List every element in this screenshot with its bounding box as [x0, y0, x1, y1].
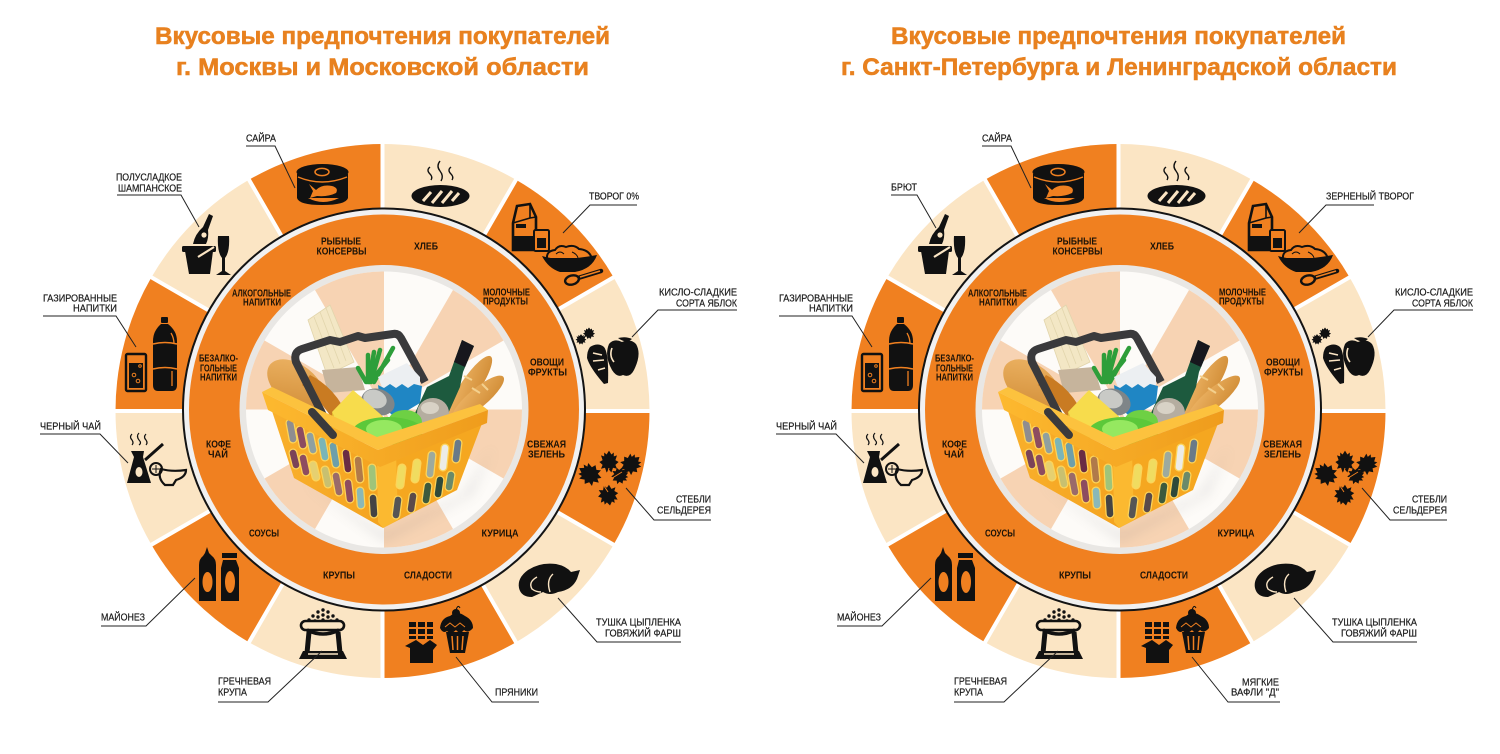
- title: Saint Petersburg: Вкусовые предпочтения покупателей: [891, 23, 1346, 50]
- callout: полусладкое шампанское: [116, 172, 199, 227]
- inner category labels: ЧАЙ: [208, 448, 228, 460]
- icon: chicken: [519, 564, 580, 597]
- icon: vegetables and fruit: [1312, 328, 1375, 384]
- callout: зерненый творог: [1299, 190, 1415, 233]
- callout: майонез: МАЙОНЕЗ: [837, 610, 881, 624]
- callout: черный чай: ЧЕРНЫЙ ЧАЙ: [776, 420, 837, 432]
- callout: кисло-сладкие сорта яблок: КИСЛО-СЛАДКИЕ: [659, 288, 737, 298]
- icon: greens: [574, 449, 646, 507]
- inner category labels: КОФЕ: [206, 440, 231, 450]
- inner category labels: ГОЛЬНЫЕ: [200, 364, 237, 374]
- callout: тушка цыпленка, говяжий фарш: ТУШКА ЦЫПЛЕНКА: [1332, 618, 1417, 628]
- inner category labels: ОВОЩИ: [1266, 358, 1300, 368]
- inner category labels: КУРИЦА: [482, 528, 518, 540]
- icon: soft drinks: [862, 317, 913, 391]
- inner category labels: ЗЕЛЕНЬ: [528, 450, 565, 460]
- callout: стебли сельдерея: [1362, 488, 1447, 520]
- inner category labels: [935, 236, 1303, 582]
- basket illustration: [258, 305, 509, 540]
- callout: кисло-сладкие сорта яблок: КИСЛО-СЛАДКИЕ: [1395, 288, 1473, 298]
- icon: canned fish: [1032, 164, 1084, 205]
- callout: брют: БРЮТ: [891, 182, 917, 194]
- title: Moscow: г. Москвы и Московской области: [176, 54, 589, 81]
- icon: soft drinks: [126, 317, 177, 391]
- icon: bread: [1148, 161, 1206, 207]
- callout: черный чай: [40, 420, 128, 463]
- inner category labels: ОВОЩИ: [530, 358, 564, 368]
- inner category labels: ПРОДУКТЫ: [1219, 296, 1264, 308]
- callout: стебли сельдерея: СЕЛЬДЕРЕЯ: [1393, 506, 1447, 516]
- inner category labels: АЛКОГОЛЬНЫЕ: [968, 288, 1027, 300]
- inner category labels: ПРОДУКТЫ: [483, 296, 528, 308]
- inner category labels: ФРУКТЫ: [1264, 368, 1303, 378]
- icon: chicken: [1255, 564, 1316, 597]
- callout: стебли сельдерея: СЕЛЬДЕРЕЯ: [657, 506, 711, 516]
- inner category labels: ФРУКТЫ: [528, 368, 567, 378]
- inner category labels: СЛАДОСТИ: [1140, 570, 1188, 582]
- panel: Moscow wheel: [40, 132, 737, 702]
- callout: мягкие вафли Д: МЯГКИЕ: [1242, 678, 1279, 688]
- callout: кисло-сладкие сорта яблок: [1368, 288, 1473, 337]
- callout: тушка цыпленка, говяжий фарш: ГОВЯЖИЙ ФАРШ: [1341, 626, 1417, 640]
- inner category labels: МОЛОЧНЫЕ: [483, 288, 530, 298]
- callout: гречневая крупа: КРУПА: [218, 688, 247, 698]
- callout: пряники: ПРЯНИКИ: [495, 688, 538, 698]
- inner category labels: НАПИТКИ: [936, 372, 973, 384]
- callout: зерненый творог: ЗЕРНЕНЫЙ ТВОРОГ: [1326, 190, 1415, 202]
- callout: майонез: МАЙОНЕЗ: [101, 610, 145, 624]
- callout: сайра: САЙРА: [246, 132, 276, 144]
- inner category labels: ХЛЕБ: [414, 242, 438, 252]
- icon: greens: [1310, 449, 1382, 507]
- wheel rings and sectors: [850, 142, 1388, 680]
- icon: cereals: [1035, 608, 1083, 659]
- callout: кисло-сладкие сорта яблок: СОРТА ЯБЛОК: [676, 298, 737, 310]
- inner category labels: СВЕЖАЯ: [1263, 440, 1302, 450]
- wheel rings and sectors: [114, 142, 652, 680]
- callout: газированные напитки: [779, 294, 872, 347]
- callout: гречневая крупа: [954, 651, 1058, 702]
- callout: сайра: [982, 132, 1031, 188]
- callout: тушка цыпленка, говяжий фарш: [558, 598, 681, 642]
- callout: мягкие вафли Д: [1192, 657, 1280, 702]
- inner category labels: СОУСЫ: [985, 528, 1015, 540]
- inner category labels: СОУСЫ: [249, 528, 279, 540]
- inner category labels: КОНСЕРВЫ: [316, 246, 367, 258]
- icon: alcohol: [918, 214, 967, 275]
- callout: черный чай: [776, 420, 864, 463]
- callout: черный чай: ЧЕРНЫЙ ЧАЙ: [40, 420, 101, 432]
- inner category labels: СЛАДОСТИ: [404, 570, 452, 582]
- callout: пряники: [456, 657, 539, 702]
- icon: cereals: [299, 608, 347, 659]
- icon: sauces: [199, 547, 239, 601]
- callout: тушка цыпленка, говяжий фарш: ТУШКА ЦЫПЛЕНКА: [596, 618, 681, 628]
- callout: газированные напитки: [43, 294, 136, 347]
- callout: кисло-сладкие сорта яблок: [632, 288, 737, 337]
- inner category labels: КУРИЦА: [1218, 528, 1254, 540]
- basket illustration: [994, 305, 1245, 540]
- inner category labels: КОФЕ: [942, 440, 967, 450]
- callout: мягкие вафли Д: ВАФЛИ "Д": [1231, 688, 1279, 698]
- icon: alcohol: [182, 214, 231, 275]
- icon: sweets: [1141, 606, 1209, 663]
- callout: тушка цыпленка, говяжий фарш: [1294, 598, 1417, 642]
- callout: газированные напитки: ГАЗИРОВАННЫЕ: [43, 294, 117, 304]
- inner category labels: [199, 236, 567, 582]
- inner category labels: АЛКОГОЛЬНЫЕ: [232, 288, 291, 300]
- icon: bread: [412, 161, 470, 207]
- title: Moscow: Вкусовые предпочтения покупателей: [155, 23, 610, 50]
- callout: газированные напитки: ГАЗИРОВАННЫЕ: [779, 294, 853, 304]
- callout: гречневая крупа: [218, 651, 322, 702]
- inner category labels: ЗЕЛЕНЬ: [1264, 450, 1301, 460]
- callout: полусладкое шампанское: ПОЛУСЛАДКОЕ: [116, 172, 182, 184]
- inner category labels: РЫБНЫЕ: [1057, 236, 1097, 248]
- callout: гречневая крупа: КРУПА: [954, 688, 983, 698]
- callout: полусладкое шампанское: ШАМПАНСКОЕ: [118, 184, 182, 194]
- inner category labels: МОЛОЧНЫЕ: [1219, 288, 1266, 298]
- icon: dairy: [513, 204, 601, 286]
- callout: майонез: [101, 578, 195, 626]
- callout: газированные напитки: НАПИТКИ: [809, 304, 853, 314]
- inner category labels: НАПИТКИ: [979, 298, 1017, 308]
- callout: сайра: САЙРА: [982, 132, 1012, 144]
- inner category labels: ГОЛЬНЫЕ: [936, 364, 973, 374]
- title: Moscow: [155, 23, 610, 81]
- inner category labels: СВЕЖАЯ: [527, 440, 566, 450]
- callout: творог 0%: ТВОРОГ 0%: [589, 192, 639, 202]
- inner category labels: НАПИТКИ: [243, 298, 281, 308]
- icon: coffee and tea: [127, 433, 186, 485]
- callout: тушка цыпленка, говяжий фарш: ГОВЯЖИЙ ФАРШ: [605, 626, 681, 640]
- inner category labels: КОНСЕРВЫ: [1052, 246, 1103, 258]
- callout: сайра: [246, 132, 295, 188]
- callout: газированные напитки: НАПИТКИ: [73, 304, 117, 314]
- inner category labels: ХЛЕБ: [1150, 242, 1174, 252]
- icon: coffee and tea: [863, 433, 922, 485]
- callout: гречневая крупа: ГРЕЧНЕВАЯ: [218, 676, 271, 688]
- inner category labels: КРУПЫ: [323, 570, 355, 582]
- icon: sauces: [935, 547, 975, 601]
- icon: sweets: [405, 606, 473, 663]
- callout: стебли сельдерея: СТЕБЛИ: [676, 494, 711, 506]
- title: Saint Petersburg: [841, 23, 1397, 81]
- inner category labels: РЫБНЫЕ: [321, 236, 361, 248]
- icon: dairy: [1249, 204, 1337, 286]
- inner category labels: БЕЗАЛКО-: [935, 354, 974, 364]
- callout: майонез: [837, 578, 931, 626]
- callout: гречневая крупа: ГРЕЧНЕВАЯ: [954, 676, 1007, 688]
- callout: стебли сельдерея: СТЕБЛИ: [1412, 494, 1447, 506]
- inner category labels: КРУПЫ: [1059, 570, 1091, 582]
- title: Saint Petersburg: г. Санкт-Петербурга и Ленинградской области: [841, 54, 1397, 81]
- inner category labels: БЕЗАЛКО-: [199, 354, 238, 364]
- icon: vegetables and fruit: [576, 328, 639, 384]
- inner category labels: ЧАЙ: [944, 448, 964, 460]
- callout: стебли сельдерея: [626, 488, 711, 520]
- callout: творог 0%: [563, 192, 639, 233]
- icon: canned fish: [296, 164, 348, 205]
- callout: кисло-сладкие сорта яблок: СОРТА ЯБЛОК: [1412, 298, 1473, 310]
- callout: брют: [891, 182, 936, 228]
- panel: Saint Petersburg wheel: [776, 132, 1473, 702]
- inner category labels: НАПИТКИ: [200, 372, 237, 384]
